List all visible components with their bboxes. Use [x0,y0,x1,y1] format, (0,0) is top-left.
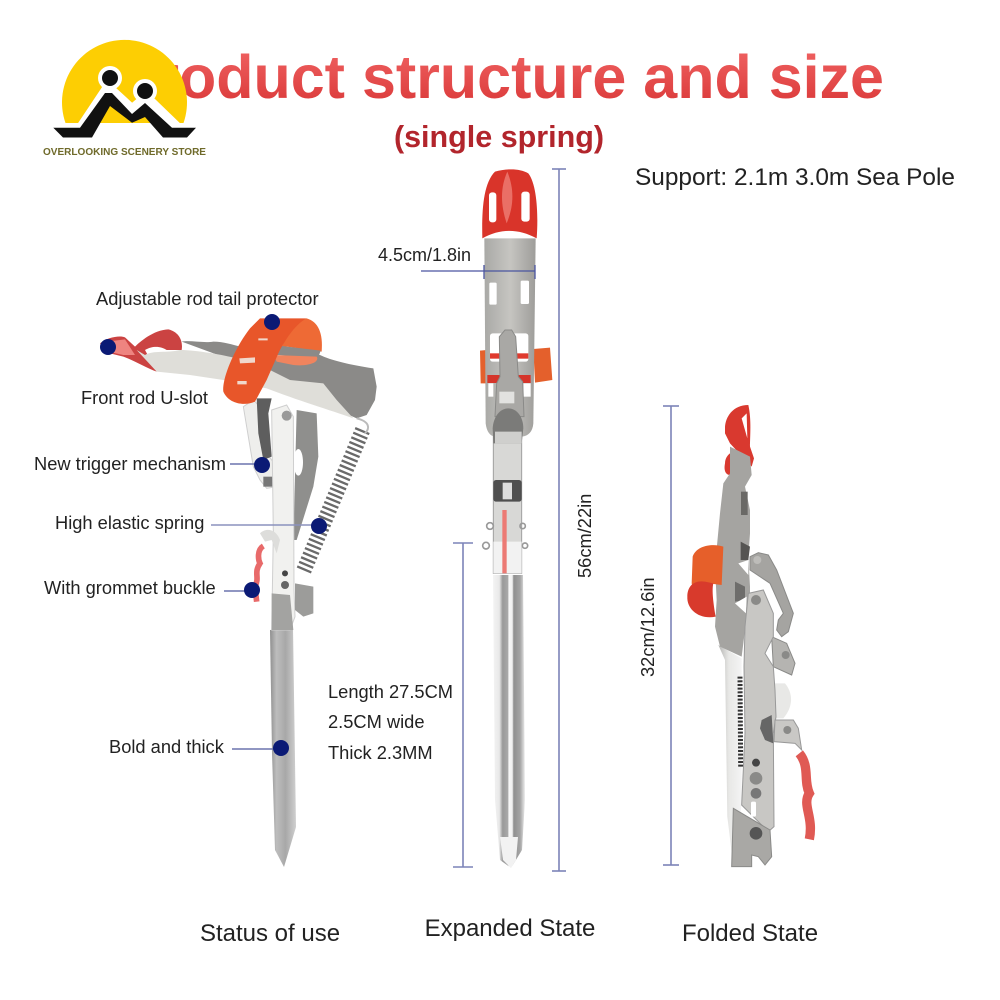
blade [493,575,525,868]
strap back loop [278,318,322,353]
rod cradle dark side [182,341,377,418]
lower bracket [295,583,313,617]
callout: rod tail protector [96,288,319,330]
blade specs text: Length 27.5CM [328,681,453,702]
caption: folded state: Folded State [682,920,818,947]
callout: spring [55,512,327,534]
callout: bold and thick: Bold and thick [109,736,225,757]
front rod U-slot [100,329,182,372]
logo [43,40,206,158]
device: folded state [687,405,810,867]
red handle [799,753,810,839]
buckle lever [255,546,263,602]
orange clip [480,348,552,383]
tube [484,238,536,437]
blade specs text: Thick 2.3MM [328,742,433,763]
main plate [742,590,776,832]
rod cradle light side [137,350,353,418]
white disc [774,683,791,718]
dimension: 56cm: 56cm/22in [574,494,595,578]
callout: spring: High elastic spring [55,512,204,533]
cap windows [489,192,496,222]
linkage [495,330,524,417]
subtitle: (single spring) [394,120,604,154]
spring [303,430,363,572]
back bracket [293,410,318,540]
callout: bold and thick [109,736,289,757]
dimension: 32cm: 32cm/12.6in [637,577,658,677]
blade [270,628,296,867]
spring coil [493,480,522,502]
blade specs text [328,681,453,763]
side rings [487,523,493,529]
callout: front rod U-slot [81,339,208,408]
red pointer [502,510,507,573]
device: expanded state [480,169,552,868]
shaft [493,433,522,573]
serrated teeth [732,677,748,767]
logo: OVERLOOKING SCENERY STORE [43,146,206,158]
title: Product structure and size [115,43,884,111]
dimension: blade length [453,543,473,867]
caption: status of use: Status of use [200,920,340,947]
callout: rod tail protector: Adjustable rod tail protector [96,288,319,309]
upper body [715,447,752,657]
red cap [482,169,537,238]
callout: front rod U-slot: Front rod U-slot [81,387,208,408]
caption: expanded state: Expanded State [425,915,595,942]
hinge arm [750,553,793,637]
trigger arm [243,400,277,488]
main arm [272,405,295,630]
side bracket [772,637,795,675]
plate rivets [751,595,761,605]
tube windows [489,283,497,305]
bottom plate [732,808,772,867]
blade specs text: 2.5CM wide [328,711,425,732]
orange clip [692,545,723,590]
device: status of use [100,318,377,867]
rod tail strap [223,318,307,404]
dimension: width: 4.5cm/1.8in [378,245,471,265]
red tip [725,405,754,467]
lever [774,720,802,750]
support note: Support: 2.1m 3.0m Sea Pole [635,164,955,191]
callout: grommet buckle: With grommet buckle [44,577,216,598]
rear rail [718,645,742,867]
callout: trigger mechanism: New trigger mechanism [34,453,226,474]
